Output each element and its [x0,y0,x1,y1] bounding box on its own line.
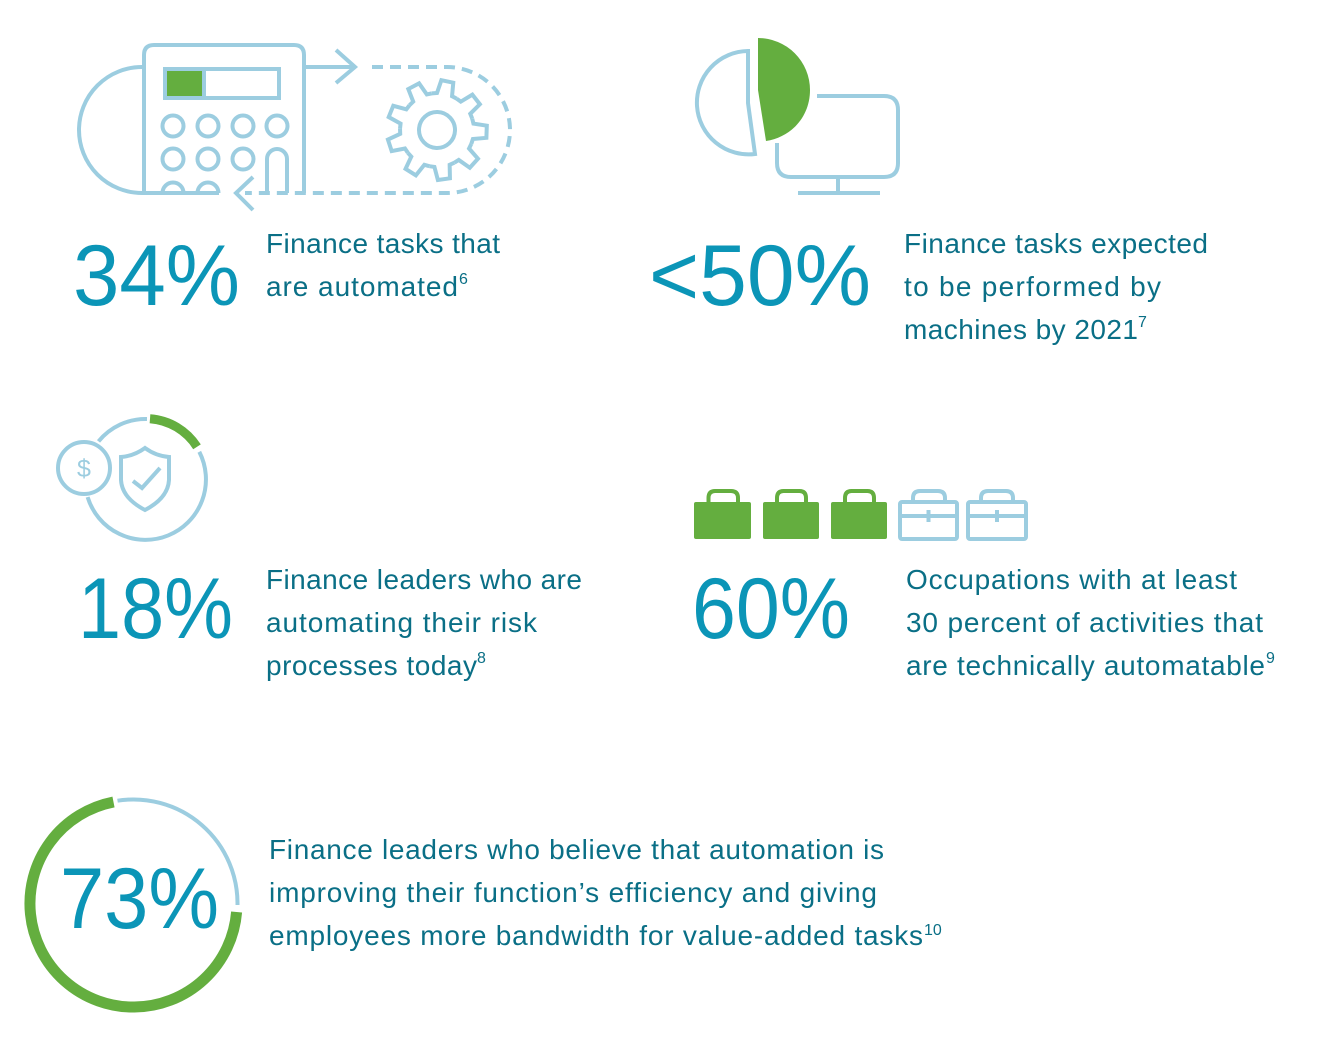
icon: five briefcases, three filled [694,491,1026,539]
text: risk processes: automating their risk [266,607,538,638]
icon: shield, dollar coin and progress ring: $ [77,455,91,483]
text: occupations automatable: are technically automatable [906,650,1265,681]
text: risk processes: processes today [266,650,477,681]
stat: <50%: <50% [649,228,871,324]
text: occupations automatable [906,564,1275,681]
text: efficiency and bandwidth [269,834,942,951]
chart: 73% progress ring [30,799,238,1007]
text: risk processes: Finance leaders who are [266,564,582,595]
text: tasks performed by machines: to be performed by [904,271,1161,302]
text: efficiency and bandwidth: 10 [924,922,942,939]
text: occupations automatable: 9 [1266,650,1275,667]
text: finance tasks automated: 6 [459,271,468,288]
icon: shield, dollar coin and progress ring [58,419,206,540]
text: occupations automatable: 30 percent of activities that [906,607,1263,638]
text: occupations automatable: Occupations with at least [906,564,1237,595]
text: finance tasks automated [266,228,500,302]
text: efficiency and bandwidth: employees more bandwidth for value-added tasks [269,920,923,951]
stat: 73%: 73% [60,851,219,947]
stat: 60%: 60% [692,561,850,657]
stat: 18%: 18% [78,561,233,657]
text: tasks performed by machines: Finance tasks expected [904,228,1208,259]
text: efficiency and bandwidth: improving their function’s efficiency and giving [269,877,877,908]
text: finance tasks automated: Finance tasks that [266,228,500,259]
icon: calculator and gear automation loop [79,45,510,210]
text: finance tasks automated: are automated [266,271,458,302]
text: efficiency and bandwidth: Finance leaders who believe that automation is [269,834,884,865]
text: risk processes [266,564,582,681]
text: tasks performed by machines [904,228,1208,345]
stat: 34%: 34% [73,228,240,324]
icon: pie chart and monitor [697,38,898,193]
text: risk processes: 8 [477,650,486,667]
text: tasks performed by machines: 7 [1138,314,1147,331]
text: tasks performed by machines: machines by 2021 [904,314,1138,345]
